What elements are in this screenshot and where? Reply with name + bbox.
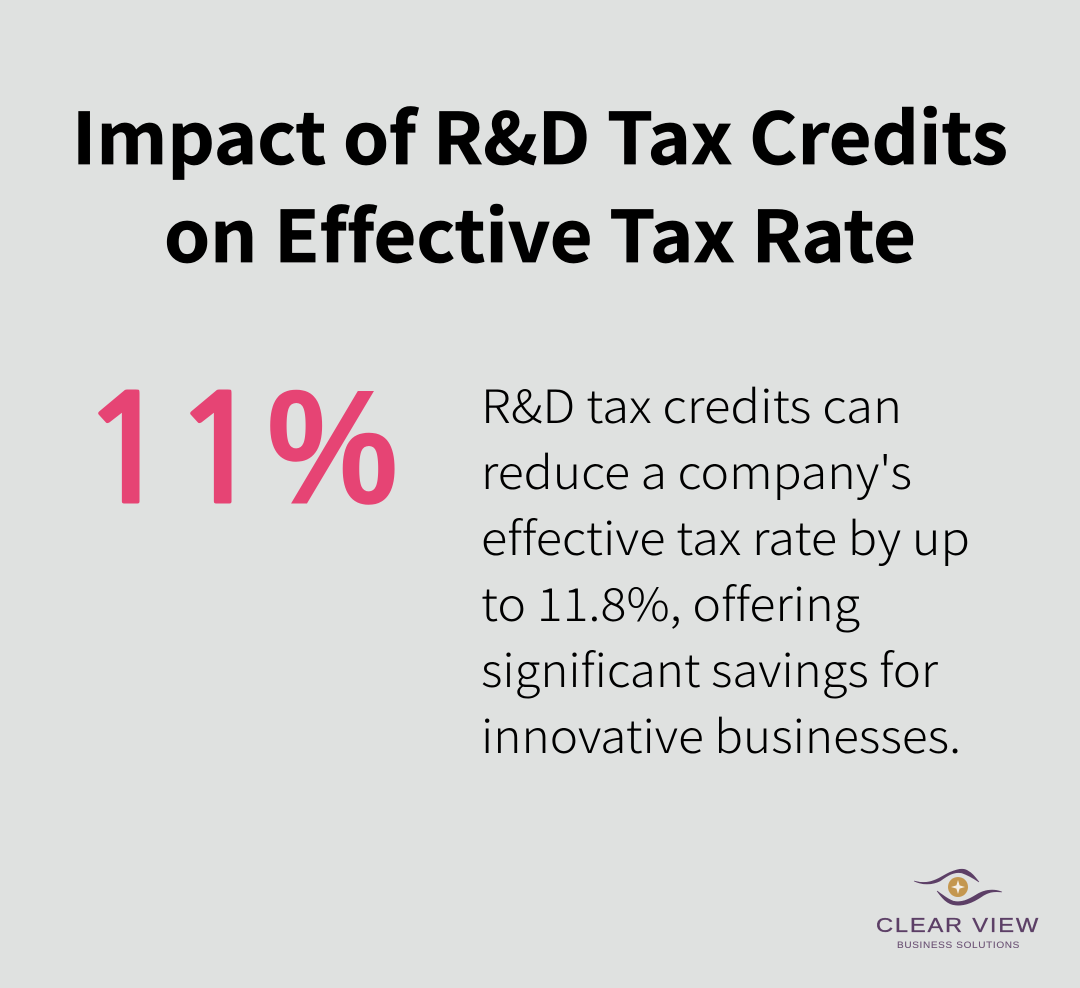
description text: innovative businesses. (481, 701, 961, 767)
description text: reduce a company's (481, 437, 912, 503)
title (72, 83, 1008, 283)
description text: to 11.8%, offering (481, 569, 860, 635)
title: on Effective Tax Rate (164, 181, 916, 283)
logo tagline: BUSINESS SOLUTIONS (897, 940, 1020, 951)
description text: effective tax rate by up (481, 503, 970, 569)
description text (481, 371, 970, 767)
description text: significant savings for (481, 635, 938, 701)
logo name: CLEAR VIEW (876, 915, 1040, 937)
description text: R&D tax credits can (481, 371, 902, 437)
big statistic: 11%: % (267, 357, 398, 538)
title: Impact of R&D Tax Credits (72, 83, 1008, 185)
big statistic: 11% (77, 357, 398, 538)
big statistic: 11%: 1 (77, 377, 177, 526)
icon: eye swooshes (914, 869, 1002, 905)
icon: gold circle with star (948, 877, 968, 897)
logo: Clear View Business Solutions (876, 869, 1040, 951)
big statistic: 11%: 1 (169, 377, 269, 526)
